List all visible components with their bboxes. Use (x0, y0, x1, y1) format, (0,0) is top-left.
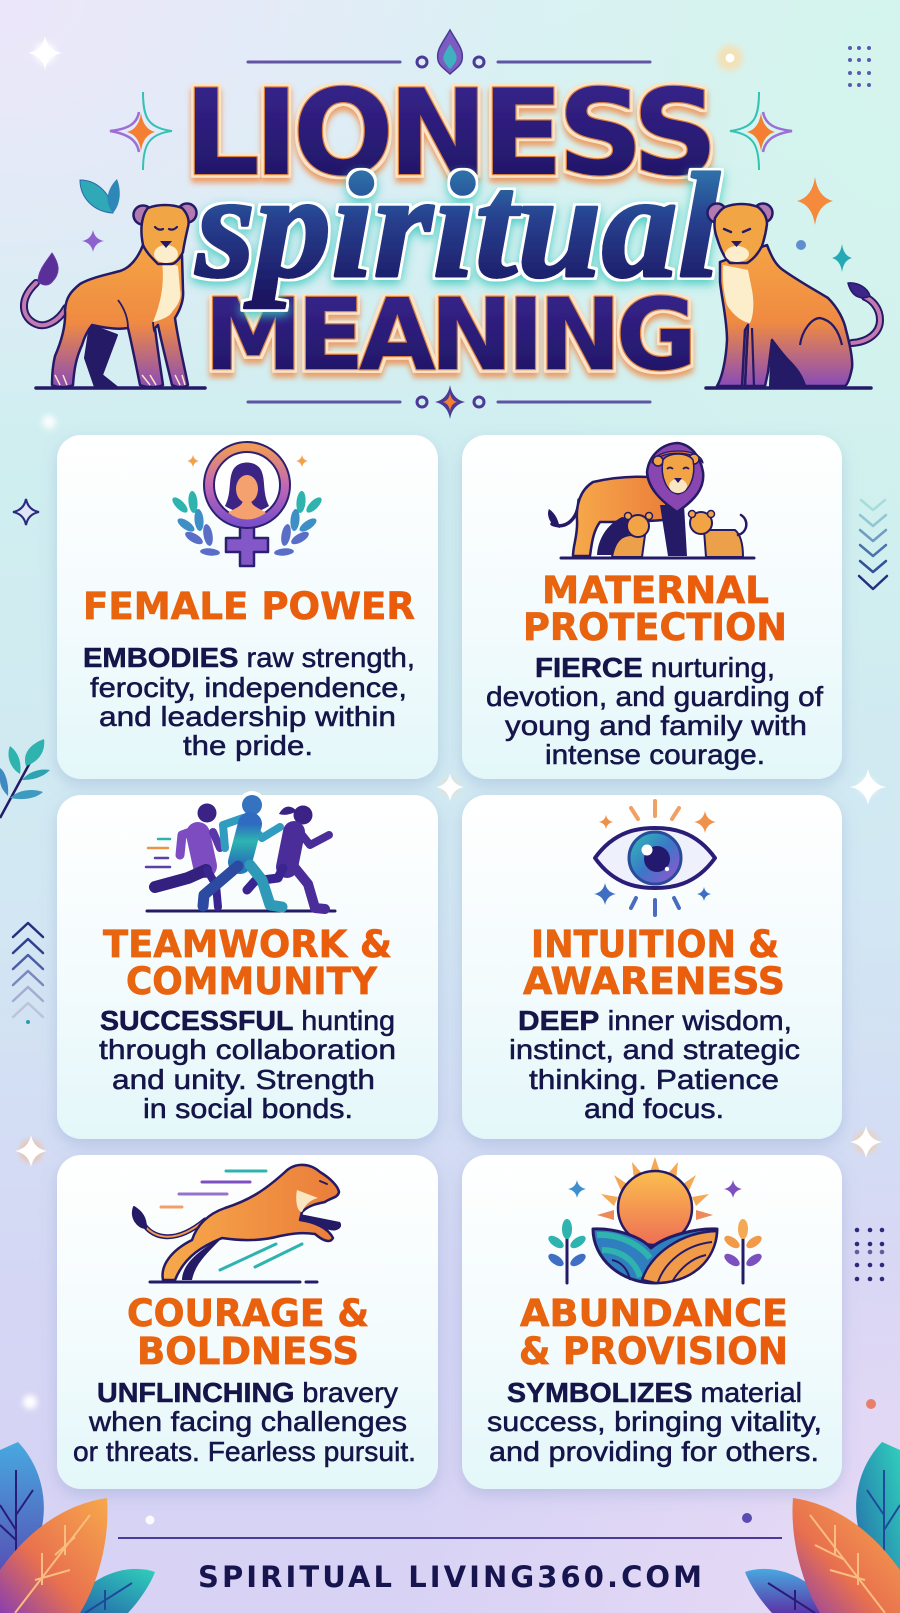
heading: intuition and awareness: AWARENESS (523, 960, 785, 1003)
title: MEANING: MEANING (204, 278, 697, 393)
heading: intuition and awareness: INTUITION & (531, 923, 779, 966)
bottom ornament (248, 385, 650, 419)
heading: abundance and provision: & PROVISION (519, 1330, 788, 1373)
heading: teamwork and community: TEAMWORK & (103, 923, 392, 966)
decoration: coral dot (866, 1399, 876, 1409)
icon: eye with rays (594, 801, 716, 915)
dot grid: top right (848, 46, 871, 87)
heading: intuition and awareness (523, 923, 785, 1003)
icon: lion with cubs (548, 443, 754, 558)
text: courage and boldness (73, 1377, 416, 1467)
decoration: center sparkle upper (436, 773, 464, 801)
heading: maternal protection: MATERNAL (542, 569, 769, 612)
decoration: right sparkle upper (850, 769, 886, 805)
text: female power: ferocity, independence, (90, 672, 407, 703)
top ornament (248, 30, 650, 74)
leaves: bottom left (0, 1442, 155, 1613)
heading: maternal protection: PROTECTION (523, 606, 787, 649)
glow: lower left of header (42, 415, 56, 429)
text: courage and boldness: UNFLINCHING bravery (97, 1377, 398, 1408)
decoration: left branch (0, 739, 50, 818)
text: female power (83, 642, 415, 761)
heading: courage and boldness: BOLDNESS (137, 1330, 359, 1373)
text: maternal protection: intense courage. (545, 739, 765, 770)
icon: female symbol with laurel (170, 447, 324, 566)
panel: intuition and awareness (462, 795, 842, 1139)
title: LIONESS: LIONESS (184, 65, 718, 203)
leaves: bottom right (745, 1442, 900, 1613)
star ornament: left of title (110, 92, 172, 170)
text: teamwork and community (99, 1005, 396, 1124)
text: teamwork and community: and unity. Strength (112, 1064, 375, 1095)
decoration: footer dots (146, 1513, 752, 1524)
heading: courage and boldness (127, 1292, 369, 1373)
text: teamwork and community: in social bonds. (143, 1093, 353, 1124)
decoration: small teal dot (26, 1020, 30, 1024)
heading: teamwork and community (103, 923, 392, 1003)
text: courage and boldness: when facing challenges (88, 1406, 407, 1437)
title: spiritual script: spiritual (195, 143, 720, 309)
text: abundance and provision (487, 1377, 822, 1467)
decoration: left chevrons (13, 923, 43, 1017)
text: teamwork and community: through collaboration (99, 1034, 396, 1065)
icon: three runners (146, 791, 335, 911)
icons: small stars left (82, 230, 104, 252)
text: intuition and awareness: and focus. (584, 1093, 724, 1124)
decoration: left star (13, 499, 39, 525)
heading: teamwork and community: COMMUNITY (126, 960, 378, 1003)
footer: website: SPIRITUAL LIVING360.COM (198, 1560, 702, 1594)
glow: top right (717, 45, 743, 71)
text: intuition and awareness: DEEP inner wisdom, (518, 1005, 792, 1036)
text: maternal protection: FIERCE nurturing, (535, 652, 775, 683)
decoration: glow dot (23, 1395, 37, 1409)
heading: female power: FEMALE POWER (83, 585, 415, 628)
panel: female power (57, 435, 438, 779)
illustration: sitting lioness (706, 204, 880, 388)
text: intuition and awareness (509, 1005, 800, 1124)
decoration: left sparkle lower (15, 1135, 47, 1167)
illustration: standing lioness (24, 204, 205, 388)
decoration: dot grid lower right (855, 1228, 884, 1281)
decoration: right chevrons (859, 500, 887, 589)
text: abundance and provision: and providing for others. (489, 1436, 819, 1467)
icon: leaf cluster (80, 179, 120, 213)
text: maternal protection: devotion, and guarding of (486, 681, 823, 712)
heading: courage and boldness: COURAGE & (127, 1292, 369, 1335)
text: abundance and provision: success, bringing vitality, (487, 1406, 822, 1437)
footer rule (118, 1537, 782, 1539)
heading: abundance and provision (519, 1292, 788, 1373)
sparkle: top left (28, 36, 62, 70)
panel: teamwork and community (57, 791, 438, 1139)
text: female power: the pride. (183, 730, 313, 761)
text: maternal protection (486, 652, 823, 770)
text: female power: EMBODIES raw strength, (83, 642, 415, 673)
decoration: right sparkle lower (850, 1126, 882, 1158)
heading: maternal protection (523, 569, 787, 649)
text: intuition and awareness: thinking. Patience (529, 1064, 779, 1095)
heading: abundance and provision: ABUNDANCE (520, 1292, 788, 1335)
icon: sun over fields (546, 1157, 764, 1283)
text: female power: and leadership within (99, 701, 396, 732)
icon: leaping lioness (133, 1165, 341, 1282)
text: courage and boldness: or threats. Fearless pursuit. (73, 1436, 416, 1467)
icons: small stars right (796, 177, 852, 272)
text: intuition and awareness: instinct, and strategic (509, 1034, 800, 1065)
star ornament: right of title (730, 92, 792, 170)
text: teamwork and community: SUCCESSFUL hunting (100, 1005, 395, 1036)
panel: maternal protection (462, 435, 842, 779)
panel: courage and boldness (57, 1155, 438, 1489)
text: abundance and provision: SYMBOLIZES material (507, 1377, 802, 1408)
panel: abundance and provision (462, 1155, 842, 1489)
text: maternal protection: young and family with (505, 710, 807, 741)
